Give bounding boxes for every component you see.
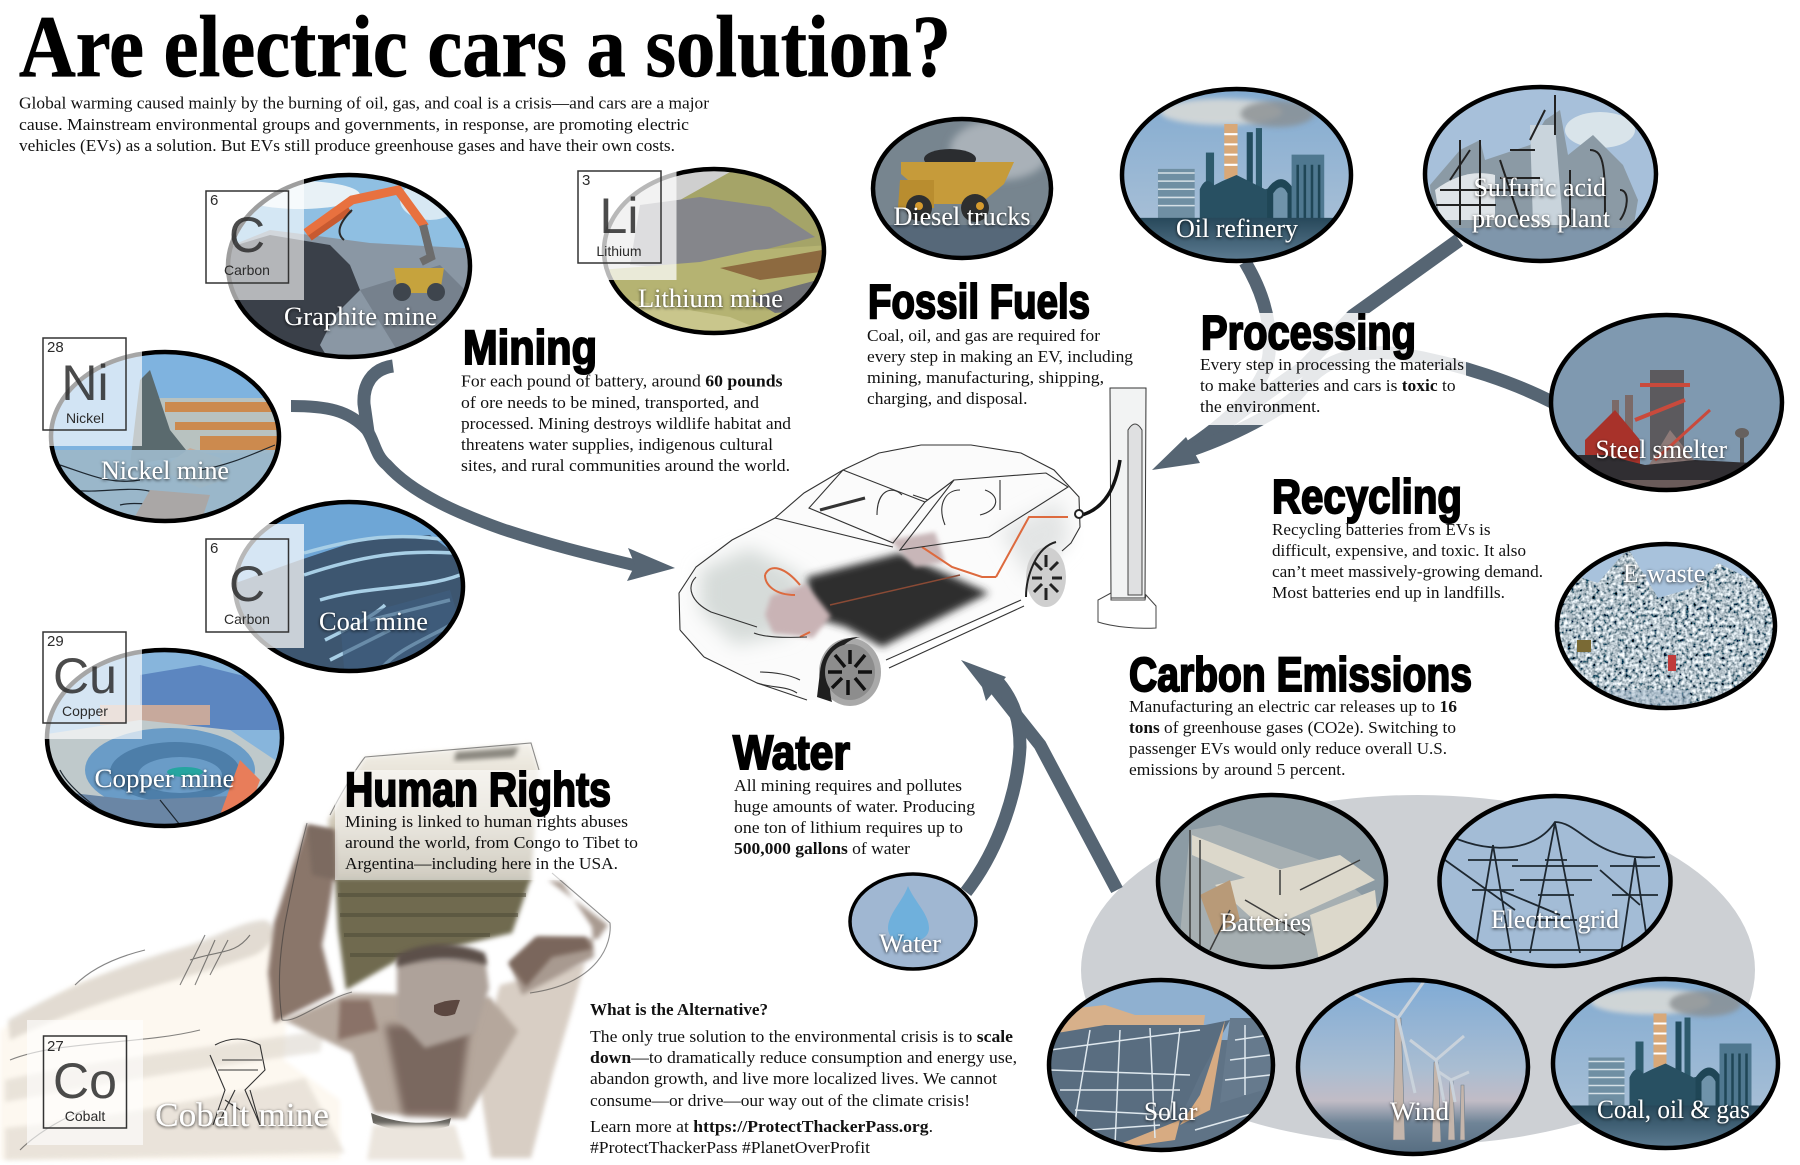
mining text: For each pound of battery, around 60 pounds [461,372,783,390]
heading: processing: Processing [1201,307,1416,360]
source: sulfuric acid process plant [1420,82,1660,268]
illustration: electric car [679,445,1080,706]
mine: coal: Coal mine [319,607,428,636]
water text: All mining requires and pollutes [734,776,962,795]
heading: water: Water [733,727,850,780]
mine: graphite [205,172,472,360]
carbon emissions text: tons of greenhouse gases (CO2e). Switching to [1129,718,1456,737]
recycling text: Recycling batteries from EVs is [1272,520,1491,539]
source: solar [1045,975,1280,1160]
element card: cobalt [27,1020,143,1145]
recycling text [1272,520,1543,602]
fossil fuels text: charging, and disposal. [867,389,1028,408]
mine: copper: 29 [47,633,64,650]
panel: human rights overlay and text [335,764,638,880]
source: sulfuric acid process plant: Sulfuric acid [1474,173,1606,202]
mine: nickel: Nickel mine [101,456,229,485]
mine: lithium [578,165,830,342]
mine: graphite: Carbon [224,262,270,278]
source: sulfuric acid process plant: process plant [1472,204,1611,233]
source: batteries [1150,790,1395,975]
source: diesel trucks: Diesel trucks [894,202,1030,231]
panel: carbon emissions [1129,649,1472,779]
intro text: vehicles (EVs) as a solution. But EVs still produce greenhouse gases and have their own costs. [19,136,675,155]
processing text [1200,355,1464,416]
source: water [850,874,976,969]
element card: cobalt: Cobalt [65,1108,105,1124]
human rights text [345,812,638,873]
mine: copper: Copper mine [94,764,234,793]
alternative text: abandon growth, and live more localized lives. We cannot [590,1069,997,1088]
source: steel smelter: Steel smelter [1596,435,1727,464]
mine: lithium: Li [600,188,638,244]
intro text: cause. Mainstream environmental groups and governments, in response, are promoting electric [19,115,689,134]
heading: recycling: Recycling [1272,471,1462,524]
mine: graphite: C [229,207,265,263]
panel: fossil fuels [867,276,1133,408]
source: wind [1290,970,1535,1160]
human rights text: Argentina—including here in the USA. [345,854,618,873]
source: oil refinery: Oil refinery [1176,214,1298,243]
mining text: threatens water supplies, indigenous cultural [461,435,773,454]
panel: what is the alternative [590,1000,1017,1157]
source: steel smelter [1545,310,1790,500]
mine: lithium: Lithium mine [638,284,783,313]
mine: nickel [30,338,285,530]
source: coal, oil and gas [1550,976,1780,1150]
alternative text [590,1027,1017,1110]
fossil fuels text: every step in making an EV, including [867,347,1133,366]
recycling text: can’t meet massively-growing demand. [1272,562,1543,581]
learn more link and hashtags: Learn more at https://ProtectThackerPass.org . [590,1117,933,1136]
source: oil refinery [1120,86,1354,264]
water text: huge amounts of water. Producing [734,797,976,816]
title: Are electric cars a solution? [19,0,951,96]
source: e-waste: E-waste [1623,559,1705,588]
alternative text: consume—or drive—our way out of the climate crisis! [590,1091,970,1110]
water text [734,776,976,858]
mine: nickel: Ni [61,355,109,411]
panel: recycling [1272,471,1543,602]
mine: coal: C [229,556,265,612]
icon: water drop [888,886,929,942]
intro text [19,94,709,155]
source: wind: Wind [1390,1097,1449,1126]
mine: copper: Copper [62,703,108,719]
mine: coal: 6 [210,540,218,557]
learn more link and hashtags [590,1117,933,1157]
label: cobalt mine: Cobalt mine [155,1097,329,1134]
mine: lithium: Lithium [596,243,642,259]
carbon emissions text: passenger EVs would only reduce overall U.S. [1129,739,1447,758]
illustration: cobalt miner carrying a sack [0,743,610,1160]
mining text [461,372,792,475]
water text: 500,000 gallons of water [734,839,910,858]
arrow: mining to car [291,366,675,581]
heading: fossil fuels: Fossil Fuels [868,276,1090,329]
mine: coal: Carbon [224,611,270,627]
carbon emissions text: emissions by around 5 percent. [1129,760,1346,779]
human rights text: around the world, from Congo to Tibet to [345,833,638,852]
source: water: Water [879,929,941,958]
alternative heading: What is the Alternative? [590,1000,768,1019]
panel: gray ellipse behind energy sources [1081,795,1755,1145]
element card: cobalt: Co [53,1053,117,1109]
mine: copper [30,632,290,835]
panel: water [733,727,976,858]
arrow: processing to charger [1152,240,1552,470]
processing text: Every step in processing the materials [1200,355,1464,374]
source: diesel trucks [870,116,1054,260]
mine: coal [200,495,470,680]
mining text: sites, and rural communities around the world. [461,456,790,475]
water text: one ton of lithium requires up to [734,818,963,837]
fossil fuels text: mining, manufacturing, shipping, [867,368,1104,387]
processing text: the environment. [1200,397,1320,416]
panel: processing overlay and text [1196,307,1466,425]
human rights text: Mining is linked to human rights abuses [345,812,628,831]
element card: cobalt: 27 [47,1038,64,1055]
fossil fuels text: Coal, oil, and gas are required for [867,326,1100,345]
illustration: charging station [1075,388,1156,628]
carbon emissions text [1129,697,1457,779]
arrow: energy and water to car [961,660,1117,892]
processing text: to make batteries and cars is toxic to [1200,376,1456,395]
mine: graphite: 6 [210,192,218,209]
mining text: processed. Mining destroys wildlife habitat and [461,414,792,433]
panel: mining [461,322,792,475]
source: solar: Solar [1144,1097,1198,1126]
source: electric grid [1432,790,1677,972]
heading: human rights: Human Rights [345,764,611,817]
source: coal, oil and gas: Coal, oil & gas [1597,1095,1750,1124]
carbon emissions text: Manufacturing an electric car releases up to 16 [1129,697,1457,716]
alternative text: down—to dramatically reduce consumption and energy use, [590,1048,1017,1067]
heading: carbon emissions: Carbon Emissions [1129,649,1472,702]
heading: mining: Mining [463,322,597,375]
mine: nickel: 28 [47,339,64,356]
fossil fuels text [867,326,1133,408]
source: batteries: Batteries [1220,908,1311,937]
intro text: Global warming caused mainly by the burning of oil, gas, and coal is a crisis—and cars are a major [19,94,709,112]
source: electric grid: Electric grid [1491,905,1619,934]
mine: nickel: Nickel [66,410,104,426]
alternative text: The only true solution to the environmental crisis is to scale [590,1027,1013,1046]
mine: lithium: 3 [582,172,590,189]
mine: graphite: Graphite mine [284,302,437,331]
recycling text: difficult, expensive, and toxic. It also [1272,541,1526,560]
source: e-waste [1550,538,1785,715]
mining text: of ore needs to be mined, transported, and [461,393,760,412]
recycling text: Most batteries end up in landfills. [1272,583,1505,602]
learn more link and hashtags: #ProtectThackerPass #PlanetOverProfit [590,1138,870,1157]
mine: copper: Cu [53,648,117,704]
